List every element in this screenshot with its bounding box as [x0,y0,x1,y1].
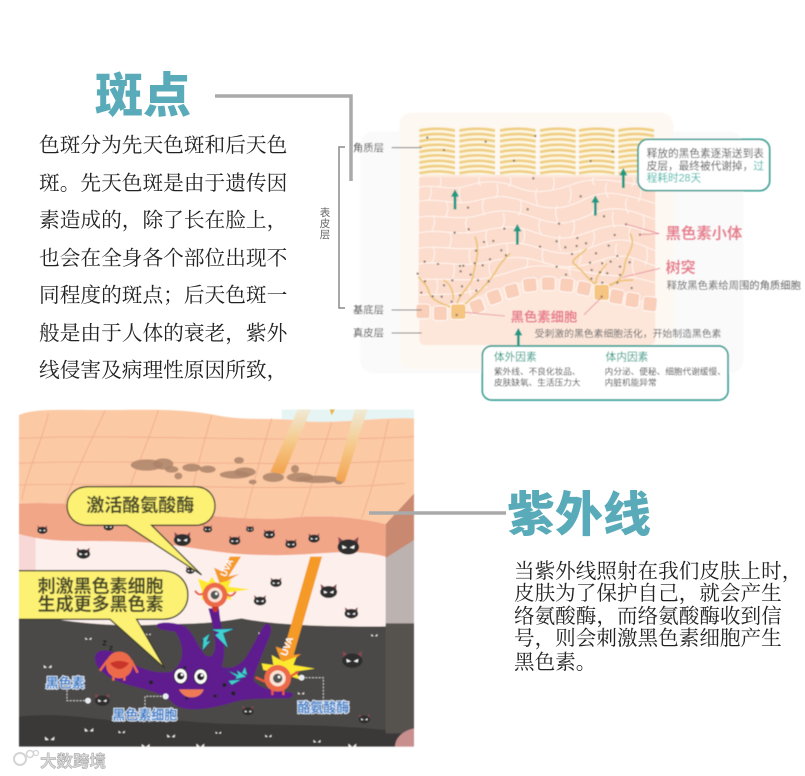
label: 黑色素 [46,675,90,703]
sleeping tyrosinase [100,639,138,681]
connector line from title to diagram [215,96,351,181]
label: 黑色素小体: 黑色素小体 [666,224,743,242]
dendrites [418,233,633,309]
growth arrows [451,168,627,346]
text block: 色斑 description [39,134,289,382]
callout: external and internal factors: 内脏机能异常 [605,377,657,388]
layer labels: 真皮层 [353,326,384,339]
layer labels [353,142,422,339]
text block: 色斑 description: 般是由于人体的衰老，紫外 [39,322,289,345]
sleeping tyrosinase: Z [102,639,107,648]
heading: 紫外线: 紫外线 [507,489,651,542]
speech bubble: 刺激黑色素细胞 [15,571,188,668]
activated tyrosinase lower [256,655,315,695]
text block: 色斑 description: 线侵害及病理性原因所致， [39,359,287,382]
stratum corneum stripes [419,127,654,175]
text block: 色斑 description: 也会在全身各个部位出现不 [39,247,288,270]
text block: UV description: 号，则会刺激黑色素细胞产生 [514,627,782,650]
epidermis bracket [320,147,345,308]
activated tyrosinase upper [195,577,250,612]
electric sparks [200,629,247,685]
label: 黑色素细胞 [112,694,177,723]
epidermis front band [19,493,414,558]
note: activated melanocyte: 受刺激的黑色素细胞活化，开始制造黑色素 [535,327,722,340]
label: 黑色素细胞: 黑色素细胞 [112,708,177,723]
watermark: 大数跨境 [40,751,106,771]
speech bubble: 激活酪氨酸酶 [67,487,215,575]
basal cells [416,277,658,321]
melanosome dots [416,135,641,316]
note: dendrite function: 释放黑色素给周围的角质细胞 [667,279,801,292]
sleeping tyrosinase: Z [109,646,113,653]
light beams [270,409,368,483]
connector line to 紫外线 heading [369,511,506,515]
melanin eyes in dark layer [44,632,378,747]
text block: 色斑 description: 同程度的斑点；后天色斑一 [39,284,287,307]
callout: external and internal factors: 体内因素 [606,351,649,364]
UVA arrow upper [214,557,241,585]
callout: external and internal factors: 体外因素 [494,351,537,364]
label: 酪氨酸酶 [297,675,349,715]
skin surface [19,410,414,524]
text block: 色斑 description: 色斑分为先天色斑和后天色 [39,134,287,157]
label: 酪氨酸酶: 酪氨酸酶 [297,700,349,715]
sky background [282,409,414,422]
epidermis bracket: 层 [320,229,330,241]
melanocyte character [95,608,293,709]
label: 黑色素: 黑色素 [46,675,85,690]
epidermis bracket: 皮 [320,217,331,230]
melanin cats in upper layers [37,522,370,723]
callout: 28 day cycle: 皮层，最终被代谢掉，过 [647,159,764,172]
callout: 28 day cycle: 释放的黑色素逐渐送到表 [647,147,764,160]
speech bubble: 激活酪氨酸酶: 激活酪氨酸酶 [86,496,194,516]
callout: external and internal factors: 皮肤缺氧、生活压力大 [494,377,581,388]
watermark [14,750,106,771]
callout: 28 day cycle [638,139,770,191]
UVA arrow upper: UVA [218,557,235,578]
text block: 色斑 description: 斑。先天色斑是由于遗传因 [39,172,287,195]
layer labels: 基底层 [353,304,384,317]
layer labels: 角质层 [353,142,384,154]
text block: UV description: 皮肤为了保护自己，就会产生 [514,582,782,605]
diagram background panels [360,113,743,373]
text block: UV description: 黑色素。 [514,651,596,674]
speech bubble: 刺激黑色素细胞: 生成更多黑色素 [38,593,164,614]
callout: external and internal factors [482,346,728,400]
UVA arrow lower: UVA [279,635,296,658]
callout: 28 day cycle: 程耗时28天 [647,171,701,184]
dark spots on skin [131,457,344,484]
title: 斑点: 斑点 [95,70,191,123]
epidermis cells [417,176,657,309]
text block: 色斑 description: 素造成的，除了长在脸上， [39,209,287,232]
label: 树突: 树突 [666,259,696,277]
text block: UV description [514,560,802,674]
text block: UV description: 当紫外线照射在我们皮肤上时， [514,560,802,583]
epidermis bracket: 表 [320,206,331,219]
callout: external and internal factors: 紫外线、不良化妆品、 [494,365,581,376]
callout: external and internal factors: 内分泌、便秘、细胞代谢缓慢、 [605,365,726,376]
label: 黑色素细胞: 黑色素细胞 [511,309,577,325]
dark dermis layer [19,533,414,747]
illustration: UV effect on skin [15,409,414,747]
panel: skin layer diagram [320,113,801,400]
speech bubble: 刺激黑色素细胞: 刺激黑色素细胞 [38,576,164,596]
UVA arrow lower [276,557,322,667]
text block: UV description: 络氨酸酶，而络氨酸酶收到信 [514,605,782,628]
pointer lines [465,224,660,316]
